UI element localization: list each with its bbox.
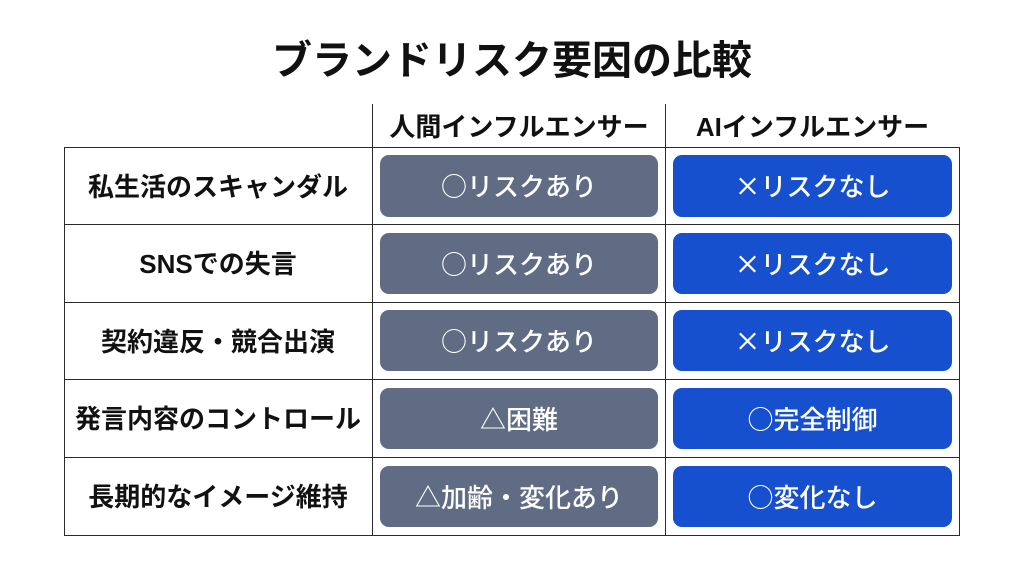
AI cell: SNS xyxy=(673,233,952,294)
human cell: contract xyxy=(380,310,658,371)
row label: scandal: 私生活のスキャンダル xyxy=(88,172,348,202)
column header: AI influencer: AIインフルエンサー xyxy=(696,112,929,142)
human cell: SNS xyxy=(380,233,658,294)
human cell: message control: △困難 xyxy=(480,400,558,436)
AI cell: scandal xyxy=(673,155,952,217)
row label: contract: 契約違反・競合出演 xyxy=(101,327,335,357)
AI cell: contract xyxy=(673,310,952,371)
column header: human influencer: 人間インフルエンサー xyxy=(389,112,649,142)
human cell: message control xyxy=(380,388,658,449)
AI cell: contract: ×リスクなし xyxy=(734,322,890,358)
title: ブランドリスク要因の比較 xyxy=(272,39,752,83)
human cell: image: △加齢・変化あり xyxy=(415,478,623,514)
row label: image: 長期的なイメージ維持 xyxy=(88,482,348,512)
AI cell: message control: ○完全制御 xyxy=(747,400,878,436)
AI cell: image xyxy=(673,466,952,527)
human cell: contract: ○リスクあり xyxy=(441,322,597,358)
human cell: scandal: ○リスクあり xyxy=(441,167,597,204)
row label: SNS: SNSでの失言 xyxy=(139,249,297,279)
AI cell: image: ○変化なし xyxy=(747,478,878,514)
AI cell: message control xyxy=(673,388,952,449)
human cell: scandal xyxy=(380,155,658,217)
human cell: image xyxy=(380,466,658,527)
AI cell: scandal: ×リスクなし xyxy=(734,167,890,204)
AI cell: SNS: ×リスクなし xyxy=(734,244,890,282)
row label: message control: 発言内容のコントロール xyxy=(75,404,361,434)
human cell: SNS: ○リスクあり xyxy=(441,244,597,282)
